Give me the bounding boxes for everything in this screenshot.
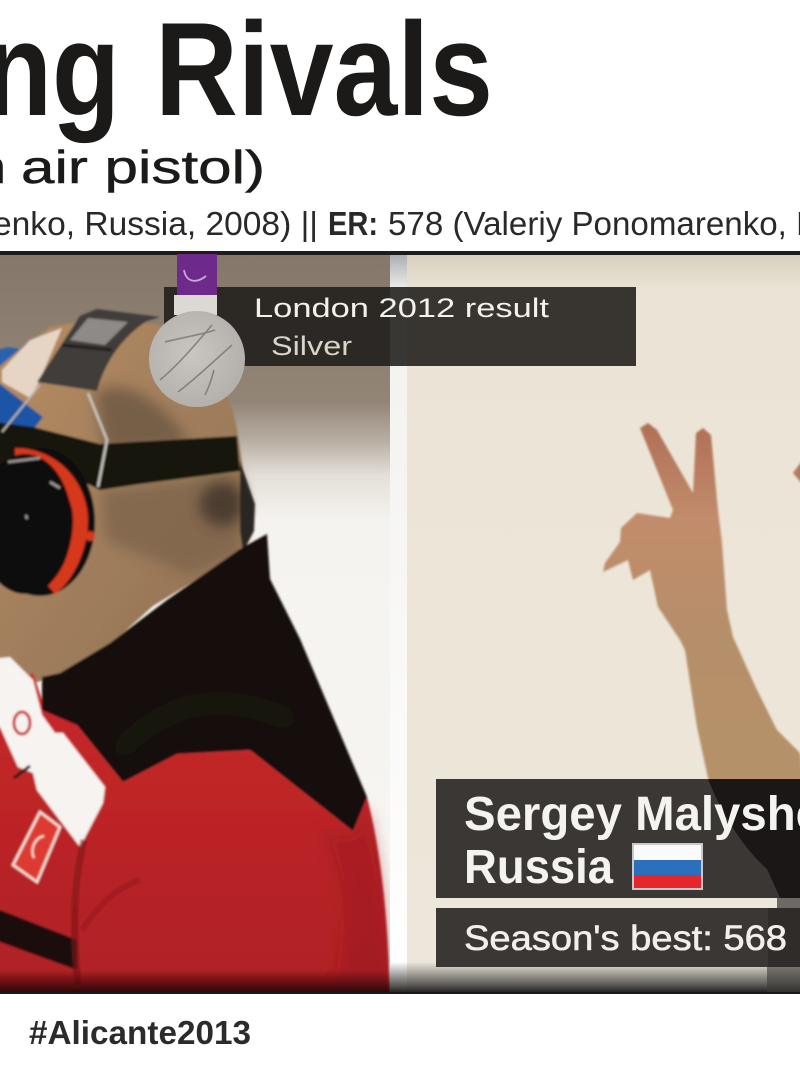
strap dark seam: [62, 345, 112, 350]
upper hair shading: [95, 387, 188, 452]
zip pull: [14, 766, 30, 778]
jacket red body: [0, 673, 390, 1000]
jacket black yoke: [42, 534, 367, 831]
medal disc: [149, 311, 245, 407]
ribbon logo: [184, 270, 206, 281]
country: Russia: [464, 841, 613, 894]
collar logo: [14, 712, 30, 734]
icon: Russian flag: [632, 843, 703, 890]
medal clasp: [174, 295, 217, 315]
lower hair shading: [100, 475, 240, 575]
result value: Silver: [271, 331, 352, 361]
title: [0, 0, 493, 144]
panel: right athlete photo: [407, 254, 800, 993]
yoke sheen: [120, 703, 290, 750]
hashtag: #Alicante2013: [29, 1014, 251, 1051]
panel: season's best: [436, 908, 800, 967]
torso below panels: [767, 967, 800, 993]
flag crescent: [32, 836, 44, 858]
result label: London 2012 result: [254, 293, 550, 323]
medal ribbon: [177, 254, 217, 299]
subtitle: air pistol): [21, 141, 265, 193]
sleeve fold: [75, 840, 84, 985]
sleeve under panel: [708, 779, 800, 898]
records line: ER:: [328, 205, 378, 242]
athlete head and neck: [0, 318, 246, 700]
callout: London 2012 result: [164, 287, 636, 366]
panel: left athlete photo: [0, 254, 390, 1000]
season's best value: Season's best: 568: [464, 919, 787, 958]
top photo rule: [0, 251, 800, 255]
raised hand and arm: [602, 422, 800, 779]
leather head strap: [37, 309, 160, 391]
strap highlight: [70, 318, 128, 345]
goggle wire: [2, 385, 40, 432]
blue goggle strap lower: [0, 382, 44, 430]
sleeve crease: [82, 880, 140, 930]
jacket bottom shadow: [0, 972, 390, 992]
flag patch: [13, 812, 60, 882]
chest stripe: [0, 902, 77, 970]
title: Rivals: [155, 0, 493, 144]
earmuff outer ring: [27, 448, 96, 598]
face edge: [793, 458, 800, 486]
icon: silver medal: [149, 254, 245, 407]
blue goggle strap upper: [0, 346, 20, 368]
torso between panels: [777, 898, 800, 908]
right photo bottom fade: [407, 962, 800, 993]
divider bottom fade: [390, 962, 407, 993]
panel: athlete name: [436, 779, 800, 898]
rear hair edge: [240, 461, 255, 552]
medal engraving: [160, 325, 232, 395]
earmuff cup: [0, 454, 72, 594]
sleeve under season panel: [768, 908, 800, 967]
earmuff red band: [15, 448, 88, 594]
earmuff gloss: [8, 458, 60, 519]
white divider between photos: [390, 254, 407, 993]
records line: enko, Russia, 2008) ||: [0, 205, 318, 242]
dark hair patch: [200, 482, 244, 526]
pale forehead highlight: [2, 328, 62, 398]
bottom photo rule: [0, 992, 800, 994]
records line: [0, 205, 800, 242]
earmuff red button: [85, 531, 95, 541]
black head band: [0, 420, 240, 490]
ear wire: [88, 393, 107, 487]
jacket right shade: [326, 796, 390, 986]
white collar band: [0, 657, 105, 847]
